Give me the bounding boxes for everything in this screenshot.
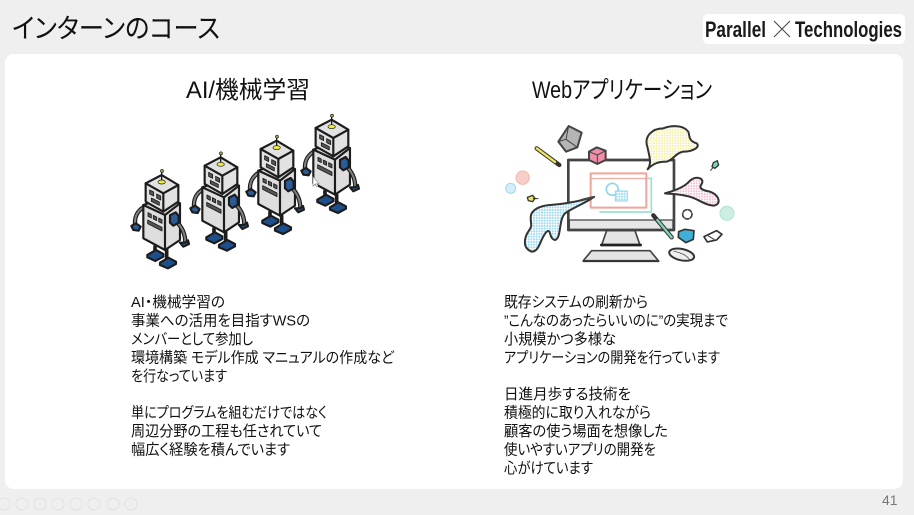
text block: Web course description: 既存システムの刷新から [504, 294, 648, 311]
title: インターンのコース [12, 14, 220, 44]
text block: AI course description: 周辺分野の工程も任されていて [131, 423, 322, 440]
logo: Parallel × Technologies: Parallel [705, 17, 766, 42]
mouse cursor [312, 176, 320, 188]
text block: AI course description: 単にプログラムを組むだけではなく [131, 405, 327, 422]
text block: Web course description: 使いやすいアプリの開発を [504, 442, 656, 459]
heading: AI/machine learning: AI/機械学習 [186, 77, 310, 104]
text block: Web course description: 顧客の使う場面を想像した [504, 423, 668, 440]
slide toolbar icons [0, 498, 138, 510]
text block: Web course description [504, 294, 728, 477]
text block: Web course description: 心がけています [504, 460, 593, 477]
text block: AI course description: を行なっています [131, 368, 227, 385]
text block: AI course description: 環境構築 モデル作成 マニュアルの作成など [131, 348, 395, 366]
text block: Web course description: 積極的に取り入れながら [504, 405, 651, 422]
text block: Web course description: 小規模かつ多様な [504, 330, 616, 348]
text block: AI course description: AI・機械学習の [131, 294, 225, 311]
page number: 41 [882, 492, 898, 508]
text block: AI course description [131, 294, 395, 459]
text block: AI course description: 事業への活用を目指すWSの [131, 312, 310, 330]
text block: AI course description: メンバーとして参加し [131, 331, 253, 348]
text block: Web course description: 日進月歩する技術を [504, 386, 631, 403]
text block: AI course description: 幅広く経験を積んでいます [131, 442, 290, 459]
logo: Parallel × Technologies [703, 14, 905, 44]
